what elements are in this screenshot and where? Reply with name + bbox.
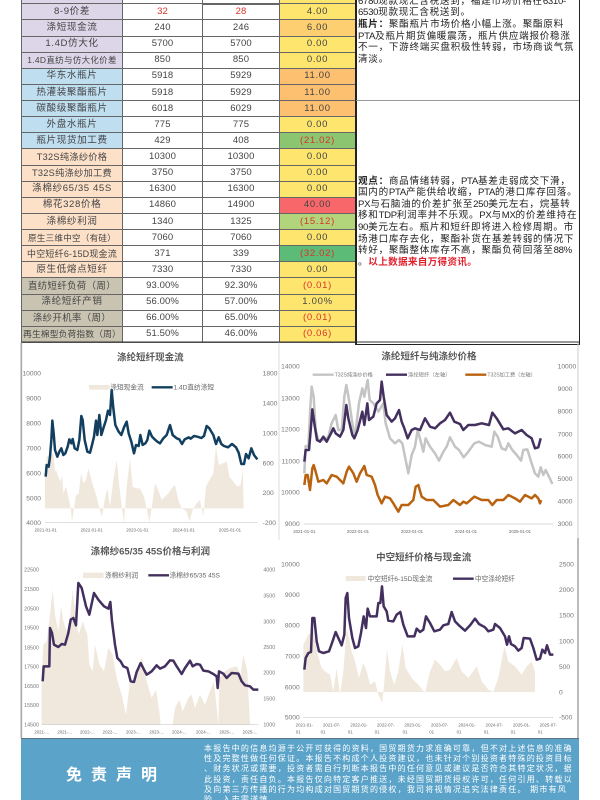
axes: 2022-01-01 [81, 527, 103, 532]
processing fee line [304, 465, 541, 512]
row group: yarn and specialty fibre: 0.00 [307, 264, 328, 275]
row group: bottle chips: 外盘水瓶片 [47, 119, 97, 130]
axes: 3000 [263, 619, 275, 625]
row group: bottle chips: 5918 [152, 70, 173, 81]
axes: 4000 [558, 499, 573, 506]
row group: bottle chips: 775 [154, 119, 171, 130]
row group: bottle chips: 11.00 [304, 70, 331, 81]
row group: operating rates: (0.06) [303, 328, 332, 339]
axes: 01 [348, 729, 353, 734]
row group: bottle chips: 瓶片现货加工费 [36, 135, 108, 146]
axes: 2022-... [80, 729, 95, 734]
axes [281, 364, 576, 534]
disclaimer banner [21, 738, 579, 800]
row group: bottle chips: 6029 [230, 103, 252, 114]
commentary: bottle chip market: 瓶片：聚酯瓶片市场价格小幅上涨。聚酯原料 [358, 19, 564, 30]
row group: yarn and specialty fibre: 7330 [230, 264, 252, 275]
axes: 2023-01-01 [401, 529, 424, 534]
legend: 中空短纤6-15D现金流 [368, 574, 433, 583]
axes: 1000 [559, 638, 574, 645]
row group: yarn and specialty fibre: (32.02) [300, 248, 335, 259]
axes: 2021-... [57, 729, 72, 734]
axes: 6000 [285, 684, 300, 691]
row group: yarn and specialty fibre: 原生低熔点短纤 [36, 264, 108, 275]
axes: 2023-... [126, 729, 141, 734]
row group: polyester staple: 涤短现金流 [47, 22, 97, 33]
axes: 2024-01-01 [173, 527, 195, 532]
commentary: market view [358, 176, 577, 268]
axes: 2023-01- [404, 723, 422, 728]
row group: operating rates [22, 278, 356, 342]
row group: bottle chips: 775 [233, 119, 249, 130]
row group: bottle chips: 429 [154, 135, 171, 146]
row group: polyester staple: 240 [154, 22, 171, 33]
row group: bottle chips: 碳酸级聚酯瓶片 [36, 103, 108, 114]
axes: 500 [559, 664, 570, 671]
axes: 9000 [285, 592, 300, 599]
row group: yarn and specialty fibre: 涤棉纱65/35 45S [32, 183, 112, 194]
row group: operating rates: 51.50% [146, 328, 179, 339]
axes: 7000 [558, 431, 573, 438]
axes: 5000 [558, 476, 573, 483]
row group: polyester staple: 1.4D仿大化 [45, 38, 99, 49]
axes: 2022-07- [377, 723, 395, 728]
axes: 01 [296, 729, 301, 734]
row group: yarn and specialty fibre: 10300 [228, 151, 254, 162]
row group: yarn and specialty fibre: 0.00 [307, 183, 328, 194]
disclaimer text: 性及完整性做任何保证。本报告不构成个人投资建议，也未针对个别投资者特殊的投资目标 [204, 754, 573, 763]
axes: 12000 [281, 427, 300, 434]
row group: operating rates: 57.00% [225, 296, 257, 307]
axes: 3500 [263, 593, 275, 599]
axes: 1000 [263, 723, 275, 729]
disclaimer text: 此投资，责任自负。本报告仅向特定客户推送，未经国贸期货授权许可，任何引用、转载以 [204, 775, 573, 784]
axes [22, 371, 278, 532]
axes: 17500 [24, 665, 39, 671]
row group: polyester staple [22, 0, 356, 68]
row group: yarn and specialty fibre [22, 149, 356, 278]
cash flow area [303, 628, 535, 703]
commentary: market view: 。以上数据来自万得资讯。 [358, 257, 477, 268]
axes: 1400 [263, 400, 278, 407]
row group: yarn and specialty fibre: 原生三维中空（有硅） [28, 233, 116, 243]
row group: yarn and specialty fibre: 0.00 [307, 232, 328, 243]
row group: operating rates: 1.00% [302, 296, 333, 307]
axes: 2021-01-01 [35, 527, 57, 532]
price line [46, 390, 257, 477]
row group: yarn and specialty fibre: 棉花328价格 [43, 199, 101, 210]
axes: 11000 [282, 458, 300, 465]
row group: polyester staple: 5700 [152, 38, 173, 49]
row group: yarn and specialty fibre: 7060 [230, 232, 252, 243]
disclaimer text: 本报告中的信息均源于公开可获得的资料，国贸期货力求准确可靠，但不对上述信息的准确 [204, 744, 573, 753]
legend [313, 371, 536, 379]
commentary: bottle chip market: 不一，下游终端买盘积极性转弱，市场商谈气氛 [358, 42, 574, 53]
profit area [42, 590, 250, 725]
row group: yarn and specialty fibre: 339 [233, 248, 249, 259]
axes: 2024-... [172, 729, 187, 734]
axes: 2023-01-01 [126, 527, 149, 532]
disclaimer text: 、财务状况或需要，投资者需自行判断本报告中的任何意见或建议是否符合其特定状况，据 [204, 764, 573, 773]
row group: yarn and specialty fibre: 3750 [230, 167, 252, 178]
row group: operating rates: (0.01) [303, 280, 332, 291]
commentary: bottle chip market: PTA及瓶片期货偏暖震荡，瓶片供应端报价稳涨 [358, 31, 571, 42]
axes: 10000 [281, 561, 300, 568]
row group: bottle chips: 11.00 [304, 103, 331, 114]
chart title: 涤棉纱65/35 45S价格与利润 [91, 546, 210, 558]
axes: 2025-01-01 [509, 529, 532, 534]
legend: 1.4D直纺涤短 [173, 383, 214, 392]
axes: 0 [559, 690, 563, 697]
chart title: 涤纶短纤现金流 [117, 351, 184, 363]
yarn price line [304, 380, 552, 484]
row group: polyester staple: 0.00 [307, 54, 328, 65]
axes: 6000 [26, 470, 41, 477]
axes: 1000 [263, 431, 278, 438]
axes: 6000 [558, 454, 573, 461]
row group: bottle chips: 6018 [152, 103, 173, 114]
axes: 2021-01- [296, 723, 314, 728]
legend: 涤纶短纤（左轴） [408, 371, 451, 379]
axes: 2025-07- [540, 723, 558, 728]
row group: yarn and specialty fibre: T32S纯涤纱价格 [37, 152, 107, 162]
row group: polyester staple: 32 [157, 6, 168, 17]
disclaimer text [204, 744, 573, 800]
axes: 01 [484, 729, 489, 734]
axes: 2022-01- [350, 723, 368, 728]
axes: 200 [263, 490, 274, 497]
axes: 8000 [285, 623, 300, 630]
axes: 2021-... [34, 729, 49, 734]
price line [43, 583, 258, 690]
legend [89, 383, 214, 392]
axes: 14500 [24, 723, 39, 729]
axes: 2025-... [219, 729, 234, 734]
axes: 1500 [263, 697, 275, 703]
row group: yarn and specialty fibre: 0.00 [307, 167, 328, 178]
axes: 19500 [24, 626, 39, 632]
row group: yarn and specialty fibre: 40.00 [304, 199, 331, 210]
axes: 01 [457, 729, 462, 734]
axes: 5000 [285, 715, 300, 722]
axes: 01 [429, 729, 435, 734]
cash flow area [45, 447, 244, 523]
chart: polyester cotton yarn price and profit [20, 538, 275, 738]
row group: polyester staple: 850 [154, 54, 171, 65]
axes: 2024-... [196, 729, 211, 734]
row group: yarn and specialty fibre: 14860 [149, 199, 176, 210]
axes: 2022-... [103, 729, 117, 734]
commentary: market view: 场港口库存去化，聚酯补货在基差转弱的情况下 [358, 234, 574, 245]
axes: 9000 [285, 521, 300, 528]
row group: yarn and specialty fibre: 1325 [230, 216, 252, 227]
axes: 18500 [24, 645, 39, 651]
axes: 2024-01-01 [455, 529, 478, 534]
row group: yarn and specialty fibre: (15.12) [300, 216, 335, 227]
row group: polyester staple: 0.00 [307, 38, 328, 49]
row group: yarn and specialty fibre: T32S纯涤纱加工费 [32, 168, 112, 178]
row group: yarn and specialty fibre: 14900 [228, 199, 254, 210]
chart title: 涤纶短纤与纯涤纱价格 [381, 351, 477, 363]
chart: polyester staple cash flow [20, 342, 278, 540]
row group: operating rates: 涤纱开机率（周） [33, 312, 111, 323]
axes: 01 [538, 729, 543, 734]
legend: 涤短现金流 [110, 383, 144, 392]
divider between commentary blocks [356, 100, 579, 101]
chart: hollow staple price and cash flow [281, 538, 579, 738]
axes: 1500 [559, 613, 574, 620]
disclaimer text: 及向第三方传播的行为均构成对国贸期货的侵权，我司将视情况追究法律责任。 期市有风 [204, 785, 567, 794]
axes: 3000 [558, 521, 573, 528]
axes: 20500 [24, 607, 39, 613]
row group: polyester staple: 850 [233, 54, 249, 65]
axes: -500 [559, 715, 573, 722]
axes: 14000 [281, 364, 300, 371]
commentary: bottle chip market [358, 0, 574, 65]
commentary: bottle chip market: 清淡。 [358, 54, 389, 65]
commentary: market view: 转好，聚酯整体库存不高，聚酯负荷回落至88% [358, 245, 572, 256]
row group: operating rates: 93.00% [146, 280, 179, 291]
row group: bottle chips: (21.02) [300, 135, 335, 146]
axes: 600 [263, 461, 274, 468]
commentary: market view: PX与石脑油的价差扩张至250美元左右，烷基转 [358, 199, 571, 210]
axes: 2023-... [149, 729, 164, 734]
row group: yarn and specialty fibre: 7060 [152, 232, 173, 243]
axes: 21500 [24, 587, 39, 593]
row group: bottle chips: 5918 [152, 87, 173, 98]
commentary panel frame [355, 0, 580, 345]
legend: 中空涤纶短纤 [475, 574, 515, 583]
row group: polyester staple: 5700 [230, 38, 252, 49]
axes: 2023-07- [431, 723, 449, 728]
row group: yarn and specialty fibre: 16300 [149, 183, 176, 194]
axes: 10000 [558, 364, 576, 371]
row group: yarn and specialty fibre: 371 [154, 248, 171, 259]
commentary: market view: 国内的PTA产能供给收缩，PTA的港口库存回落。 [358, 187, 577, 198]
axes: 4000 [263, 568, 275, 574]
row group: yarn and specialty fibre: 3750 [152, 167, 173, 178]
axes: 2025-01-01 [219, 527, 242, 532]
price line [304, 586, 553, 670]
legend: 涤棉纱利润 [105, 571, 139, 580]
row group: bottle chips: 5929 [230, 70, 252, 81]
axes: 2000 [263, 671, 275, 677]
axes: 7000 [26, 446, 41, 453]
axes: 2500 [263, 645, 275, 651]
row group: yarn and specialty fibre: 中空短纤6-15D现金流 [27, 249, 117, 259]
row group: operating rates: 65.00% [225, 312, 257, 323]
axes: 8000 [26, 420, 41, 427]
chart title: 中空短纤价格与现金流 [376, 551, 472, 563]
row group: yarn and specialty fibre: 0.00 [307, 151, 328, 162]
disclaimer heading: 免责声明 [66, 767, 166, 784]
row group: bottle chips: 热灌装聚酯瓶片 [36, 87, 108, 98]
chart: staple vs pure polyester yarn price [278, 342, 579, 540]
axes: -200 [263, 520, 276, 527]
row group: yarn and specialty fibre: 7330 [152, 264, 173, 275]
row group: bottle chips: 408 [233, 135, 249, 146]
row group: bottle chips [22, 68, 356, 149]
row group: polyester staple: 8-9价差 [54, 6, 90, 17]
axes: 2021-07- [323, 723, 341, 728]
axes: 2022-01-01 [347, 529, 370, 534]
axes: 4000 [26, 520, 41, 527]
axes: 01 [511, 729, 516, 734]
row group: operating rates: (0.01) [303, 312, 332, 323]
row group: yarn and specialty fibre: 涤棉纱利润 [47, 216, 97, 227]
axes: 7000 [285, 654, 300, 661]
row group: bottle chips: 11.00 [304, 87, 331, 98]
legend [83, 571, 221, 580]
row group: operating rates: 直纺短纤负荷（周） [28, 280, 116, 291]
row group: bottle chips: 0.00 [307, 119, 328, 130]
axes: 8000 [558, 409, 573, 416]
axes: 22500 [24, 568, 39, 574]
row group: polyester staple: 4.00 [307, 6, 328, 17]
axes: 2021-01-01 [293, 529, 316, 534]
row group: polyester staple: 1.4D直纺与仿大化价差 [27, 55, 117, 65]
row group: operating rates: 66.00% [146, 312, 179, 323]
axes [24, 568, 275, 734]
axes: 2500 [559, 561, 574, 568]
legend: 涤棉纱65/35 45S [170, 571, 221, 580]
axes: 9000 [558, 386, 573, 393]
axes: 13000 [281, 395, 300, 402]
axes: 01 [375, 729, 380, 734]
axes: 5000 [26, 495, 41, 502]
axes: 2024-07- [486, 723, 504, 728]
row group: yarn and specialty fibre: 16300 [228, 183, 254, 194]
row group: yarn and specialty fibre: 1340 [152, 216, 173, 227]
axes: 1800 [263, 371, 278, 378]
axes: 2024-01- [458, 723, 476, 728]
axes: 01 [403, 729, 408, 734]
axes: 2025-01- [513, 723, 531, 728]
axes: 15500 [24, 703, 39, 709]
legend: T32S加工费（左轴） [487, 371, 536, 379]
axes: 2025-... [243, 729, 257, 734]
row group: yarn and specialty fibre: 10300 [149, 151, 176, 162]
commentary: market view: 移和TDP利润率并不乐观。PX与MX的价差维持在 [358, 210, 577, 221]
axes: 01 [321, 729, 326, 734]
axes: 10000 [22, 371, 41, 378]
row group: bottle chips: 5929 [230, 87, 252, 98]
axes: 9000 [26, 395, 41, 402]
axes: 2000 [559, 587, 574, 594]
row group: operating rates: 46.00% [225, 328, 257, 339]
axes [281, 561, 574, 734]
legend: T32S纯涤纱价格 [335, 371, 374, 379]
commentary: market view: 90美元左右。瓶片和短纤即将进入检修周期。市 [358, 222, 574, 233]
staple price line [304, 382, 541, 462]
legend [346, 574, 515, 583]
row group: polyester staple: 6.00 [307, 22, 328, 33]
row group: polyester staple: 246 [233, 22, 249, 33]
row group: operating rates: 56.00% [146, 296, 179, 307]
row group: operating rates: 涤纶短纤产销 [41, 296, 103, 307]
row group: operating rates: 再生棉型负荷指数（周） [23, 329, 121, 339]
axes: 16500 [24, 684, 39, 690]
row group: operating rates: 92.30% [225, 280, 257, 291]
data table [21, 0, 355, 343]
row group: polyester staple: 28 [236, 6, 246, 17]
commentary: bottle chip market: 6530现款现汇含税送到。 [358, 7, 471, 18]
commentary: market view: 观点：商品情绪转弱，PTA基差走弱成交下滑， [358, 176, 571, 186]
axes: 10000 [281, 490, 300, 497]
row group: bottle chips: 华东水瓶片 [47, 70, 97, 81]
